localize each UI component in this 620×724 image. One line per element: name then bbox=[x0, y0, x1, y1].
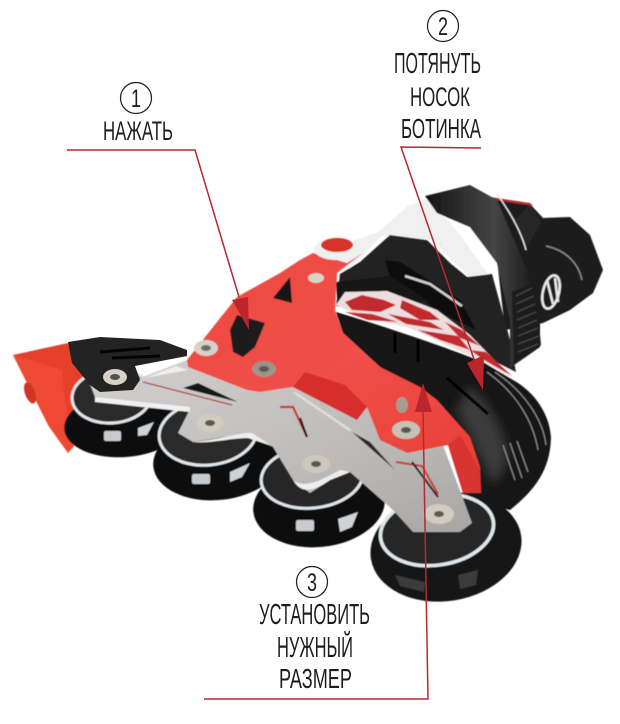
callout 2: pull toe: 2 bbox=[438, 13, 448, 41]
rear black wheels and liner bbox=[336, 312, 551, 510]
callout 1: press: 1 bbox=[131, 85, 141, 113]
callout 3: set size: НУЖНЫЙ bbox=[277, 630, 353, 664]
white cuff bbox=[314, 198, 490, 278]
callout 3: set size: УСТАНОВИТЬ bbox=[259, 599, 370, 631]
black mesh upper bbox=[336, 235, 516, 372]
callout 2: pull toe: БОТИНКА bbox=[401, 113, 481, 144]
callout 3: set size: 3 bbox=[307, 569, 317, 597]
callout 2: pull toe: НОСОК bbox=[410, 82, 470, 112]
red button bbox=[314, 238, 356, 260]
screws bbox=[194, 273, 454, 524]
wheel 3 bbox=[249, 441, 389, 554]
rear pad bbox=[490, 197, 603, 330]
red shell bbox=[187, 253, 481, 493]
vent slot bbox=[273, 277, 292, 303]
wheel 2 bbox=[149, 396, 287, 507]
callout 2: pull toe: ПОТЯНУТЬ bbox=[394, 48, 481, 80]
callout 1: press: НАЖАТЬ bbox=[103, 116, 173, 146]
press latch bbox=[230, 315, 265, 357]
rear bracket bbox=[68, 337, 187, 392]
logo on pad bbox=[539, 274, 563, 310]
red mesh panel bbox=[336, 291, 512, 378]
callout 2: pull toe bbox=[394, 10, 484, 390]
wheel 4 bbox=[362, 482, 530, 612]
illustration: inline skate bbox=[13, 185, 603, 612]
callout 3: set size: РАЗМЕР bbox=[279, 663, 352, 694]
strap bbox=[425, 185, 540, 368]
wheel 1 bbox=[61, 366, 189, 462]
woven strip bbox=[336, 276, 430, 302]
callout 3: set size bbox=[204, 383, 432, 699]
brake bbox=[13, 343, 88, 453]
silver frame bbox=[90, 360, 472, 532]
callout 1: press bbox=[67, 82, 249, 330]
